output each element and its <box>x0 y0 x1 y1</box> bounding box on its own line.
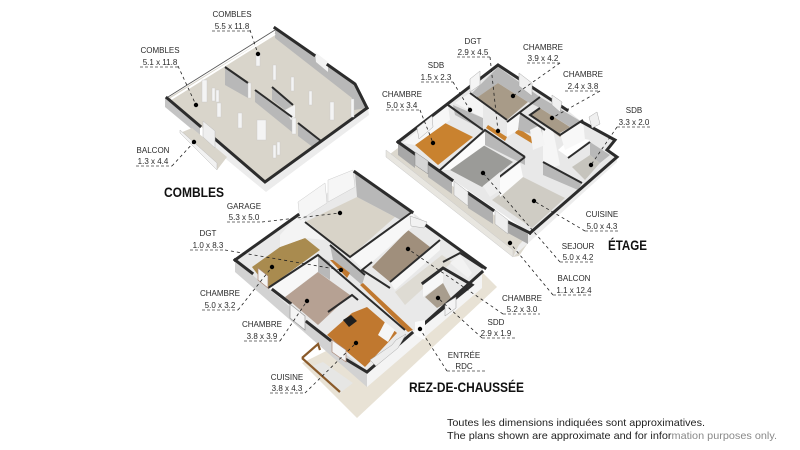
labels: room dimensions: 1.5 x 2.3 <box>421 73 452 82</box>
disclaimer note: Toutes les dimensions indiquées sont approximatives. <box>447 417 705 429</box>
labels: room dimensions: 5.0 x 3.2 <box>205 301 236 310</box>
plan: combles floor <box>165 28 369 192</box>
labels: room dimensions: COMBLES <box>140 46 180 55</box>
labels: room dimensions: CHAMBRE <box>200 289 240 298</box>
labels: room dimensions: 1.3 x 4.4 <box>138 157 169 166</box>
disclaimer note: The plans shown are approximate and for infor mation purposes only. <box>447 430 777 442</box>
labels: room dimensions: 3.8 x 3.9 <box>247 332 278 341</box>
labels: room dimensions: 3.8 x 4.3 <box>272 384 303 393</box>
labels: room dimensions: 2.9 x 1.9 <box>481 329 512 338</box>
labels: room dimensions: DGT <box>465 37 482 46</box>
plan: etage floor <box>398 65 617 244</box>
disclaimer note <box>447 417 777 442</box>
labels: room dimensions: CHAMBRE <box>502 294 542 303</box>
icon: wood stove <box>343 315 357 327</box>
labels: room dimensions: 5.2 x 3.0 <box>507 305 538 314</box>
labels: room dimensions: SDD <box>488 318 505 327</box>
labels: room dimensions: 2.4 x 3.8 <box>568 82 599 91</box>
plan: etage balcony <box>386 148 617 257</box>
labels: room dimensions: BALCON <box>137 146 170 155</box>
labels: room dimensions: SDB <box>428 61 444 70</box>
plan: rez-de-chaussee ground <box>302 273 497 418</box>
labels: room dimensions: SDB <box>626 106 642 115</box>
labels: room dimensions: 5.1 x 11.8 <box>143 58 178 67</box>
plan: rez-de-chaussee floor <box>235 170 485 387</box>
labels: room dimensions: SEJOUR <box>562 242 594 251</box>
leader lines and dots <box>172 30 617 393</box>
labels: room dimensions: 3.3 x 2.0 <box>619 118 650 127</box>
labels: room dimensions: 5.3 x 5.0 <box>229 213 260 222</box>
labels: room dimensions: GARAGE <box>227 202 261 211</box>
labels: room dimensions: 1.0 x 8.3 <box>193 241 224 250</box>
labels: room dimensions: 1.1 x 12.4 <box>556 286 592 295</box>
heading: etage: ÉTAGE <box>608 238 647 253</box>
plan: exterior stairs <box>302 344 353 393</box>
labels: room dimensions: CHAMBRE <box>382 90 422 99</box>
labels: room dimensions: CHAMBRE <box>242 320 282 329</box>
labels: room dimensions: 5.0 x 4.2 <box>563 253 594 262</box>
heading: rez-de-chaussee: REZ-DE-CHAUSSÉE <box>409 380 524 395</box>
labels: room dimensions: CUISINE <box>586 210 618 219</box>
labels: room dimensions <box>136 10 650 393</box>
labels: room dimensions: CHAMBRE <box>563 70 603 79</box>
labels: room dimensions: RDC <box>455 362 473 371</box>
labels: room dimensions: ENTRÉE <box>448 351 480 360</box>
labels: room dimensions: COMBLES <box>212 10 252 19</box>
labels: room dimensions: 5.0 x 3.4 <box>387 101 418 110</box>
labels: room dimensions: 5.0 x 4.3 <box>587 222 618 231</box>
labels: room dimensions: 5.5 x 11.8 <box>215 22 250 31</box>
labels: room dimensions: 2.9 x 4.5 <box>458 48 489 57</box>
labels: room dimensions: 3.9 x 4.2 <box>528 54 559 63</box>
heading: combles: COMBLES <box>164 185 224 200</box>
labels: room dimensions: BALCON <box>558 274 591 283</box>
labels: room dimensions: CUISINE <box>271 373 303 382</box>
labels: room dimensions: DGT <box>200 229 217 238</box>
labels: room dimensions: CHAMBRE <box>523 43 563 52</box>
